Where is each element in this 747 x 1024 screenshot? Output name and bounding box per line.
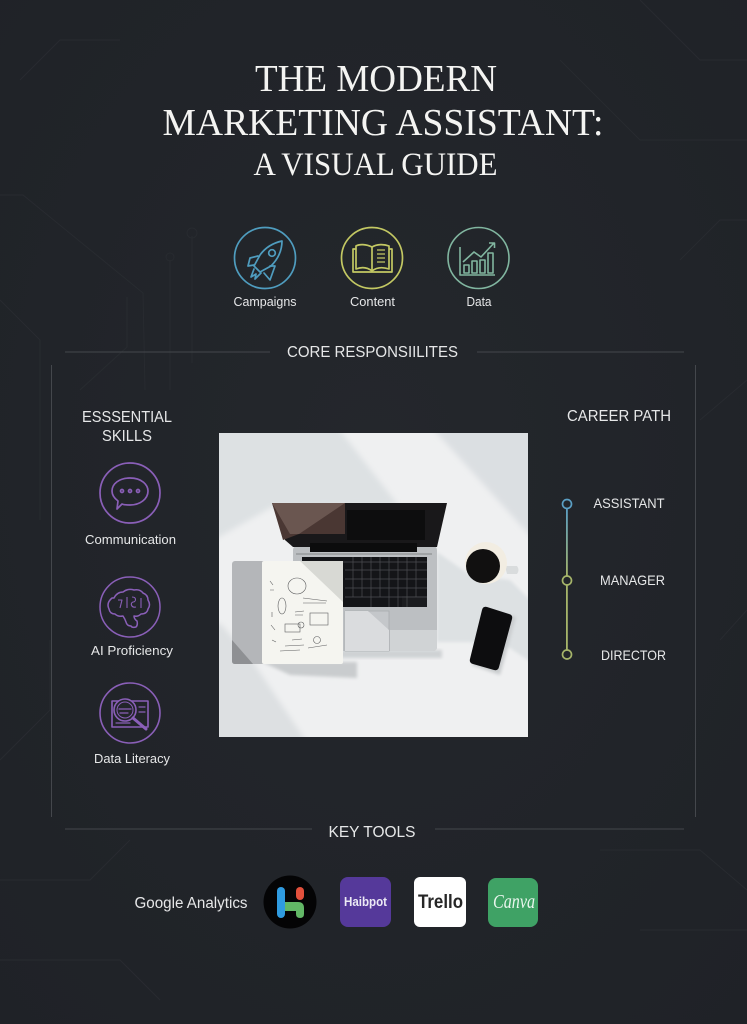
trackpad — [345, 611, 389, 651]
label: AI proficiency: AI Proficiency — [91, 644, 174, 658]
notebook — [232, 561, 264, 664]
label: content: Content — [350, 295, 396, 309]
icon: data literacy magnifier — [100, 683, 160, 743]
label: communication: Communication — [85, 533, 176, 547]
icon: AI brain — [100, 577, 160, 637]
photo: laptop on a desk — [219, 433, 528, 737]
label: data: Data — [466, 295, 492, 309]
title: MARKETING ASSISTANT: — [162, 102, 604, 144]
section heading: core responsibilities: CORE RESPONSIILITES — [287, 344, 458, 361]
label: assistant: ASSISTANT — [594, 495, 665, 511]
heading: career path: CAREER PATH — [567, 408, 671, 425]
key tools row — [134, 876, 538, 928]
timeline — [562, 500, 572, 659]
label: director: DIRECTOR — [601, 647, 666, 663]
panel frame lines — [52, 365, 696, 817]
smartphone — [470, 607, 516, 675]
tool: hubspot — [340, 877, 391, 927]
icon: communication speech bubble — [100, 463, 160, 523]
title: A VISUAL GUIDE — [254, 147, 498, 183]
title — [162, 58, 604, 183]
section heading: key tools: KEY TOOLS — [328, 824, 416, 841]
tool: google analytics: Google Analytics — [134, 895, 248, 912]
icon: data chart — [448, 228, 509, 288]
heading: essential skills: ESSSENTIAL — [82, 409, 172, 426]
icon: campaigns rocket — [234, 228, 296, 288]
label: campaigns: Campaigns — [234, 295, 296, 309]
panel: essential skills — [82, 409, 176, 766]
laptop base — [293, 546, 437, 651]
keyboard — [302, 557, 427, 607]
tool: hubspot: Haibpot — [344, 894, 388, 909]
tool: black circle H logo — [264, 876, 316, 928]
icon: content book — [342, 228, 402, 288]
shadow bands on the desk — [219, 433, 395, 537]
laptop screen — [272, 503, 447, 547]
tool: trello: Trello — [418, 892, 463, 913]
tool: canva — [488, 878, 538, 927]
tool: trello — [414, 877, 466, 927]
title: THE MODERN — [255, 58, 497, 100]
panel: career path — [562, 408, 671, 663]
coffee cup — [465, 542, 518, 584]
panel: essential skills: SKILLS — [102, 428, 152, 445]
label: data literacy: Data Literacy — [94, 752, 171, 766]
icon row: core responsibilities — [234, 228, 509, 309]
label: manager: MANAGER — [600, 572, 665, 588]
tool: canva: Canva — [493, 891, 535, 913]
